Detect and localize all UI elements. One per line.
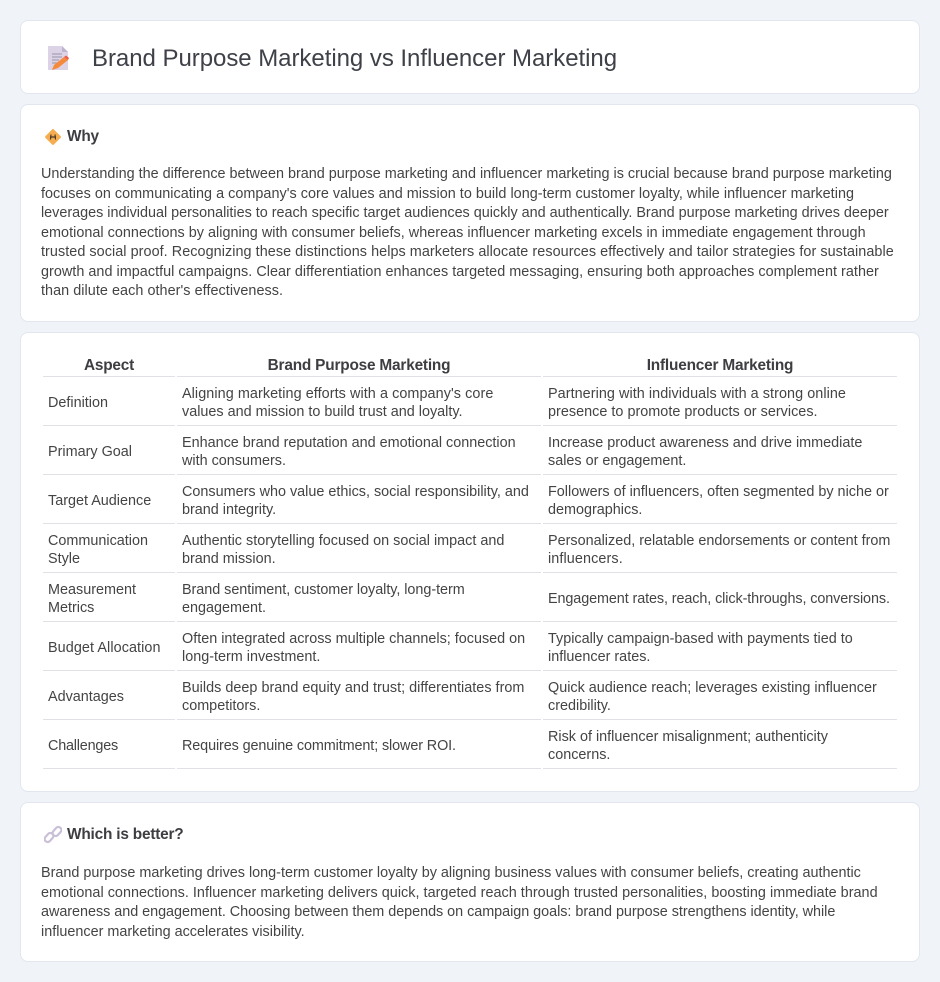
row: advantages: Builds deep brand equity and trust; differentiates from [182,680,524,696]
title: Brand Purpose Marketing vs Influencer Marketing [92,45,617,72]
row: advantages: Advantages [48,689,124,705]
text: which is better paragraph [41,865,878,940]
row: definition: Aligning marketing efforts with a company's core [182,386,493,402]
icon: document with pencil [48,46,69,70]
row: definition [48,386,846,420]
row: primary goal: with consumers. [182,453,286,469]
row: primary goal: Enhance brand reputation and emotional connection [182,435,516,451]
table: comparison [43,357,897,769]
text: which is better paragraph: awareness and engagement. Choosing between them depends on campaign goals: brand purpose strengthens identity, while [41,904,835,920]
row: communication style: influencers. [548,551,623,567]
icon: warning diamond [45,129,61,145]
panel: header [20,20,920,94]
text: which is better paragraph: emotional connections. Influencer marketing delivers quick, targeted reach through trusted personalities, boosting immediate brand [41,884,878,900]
text: why paragraph [41,166,894,299]
row: communication style: Style [48,551,80,567]
row: definition: values and mission to build trust and loyalty. [182,404,462,420]
row: measurement metrics: Metrics [48,600,94,616]
heading: which is better: Which is better? [67,826,184,843]
row: challenges [48,729,828,763]
heading: why: Why [67,128,99,145]
row: definition: Definition [48,395,108,411]
row: communication style: Communication [48,533,148,549]
row: target audience: Followers of influencers, often segmented by niche or [548,484,889,500]
row: communication style: Authentic storytelling focused on social impact and [182,533,504,549]
row: definition: Partnering with individuals with a strong online [548,386,846,402]
text: why paragraph: growth and impactful campaigns. Clear differentiation enhances targeted messaging, ensuring both approaches complement rather [41,264,879,280]
row: budget allocation: Budget Allocation [48,640,161,656]
row: target audience: demographics. [548,502,642,518]
row: budget allocation: Typically campaign-based with payments tied to [548,631,853,647]
row: challenges: concerns. [548,747,610,763]
text: why paragraph: Understanding the difference between brand purpose marketing and influencer marketing is crucial because brand purpose marketing [41,166,892,182]
row: measurement metrics: Engagement rates, reach, click-throughs, conversions. [548,591,890,607]
row: primary goal [48,435,862,469]
row: target audience: Consumers who value ethics, social responsibility, and [182,484,529,500]
panel: which is better [20,802,920,962]
row: communication style: brand mission. [182,551,276,567]
panel: why [20,104,920,322]
icon: chain link [44,826,62,844]
row: budget allocation [48,631,853,665]
text: why paragraph: emotional connections by aligning with consumer beliefs, whereas influencer marketing excels in immediate engagement through [41,224,866,240]
row: measurement metrics: Measurement [48,582,136,598]
row: challenges: Risk of influencer misalignment; authenticity [548,729,828,745]
row: primary goal: Increase product awareness and drive immediate [548,435,862,451]
row: measurement metrics: engagement. [182,600,266,616]
row: primary goal: sales or engagement. [548,453,686,469]
text: why paragraph: focuses on communicating a company's core values and mission to build long-term customer loyalty, while influencer marketing [41,186,854,202]
row: measurement metrics: Brand sentiment, customer loyalty, long-term [182,582,465,598]
text: why paragraph: leverages individual personalities to reach specific target audiences quickly and authentically. Brand purpose marketing drives deeper [41,205,889,221]
row: communication style [48,533,890,567]
row: budget allocation: influencer rates. [548,649,650,665]
row: advantages: credibility. [548,698,611,714]
row: challenges: Challenges [48,738,118,754]
row: target audience: Target Audience [48,493,151,509]
row: target audience [48,484,889,518]
text: which is better paragraph: influencer marketing accelerates visibility. [41,924,305,940]
row: measurement metrics [48,582,890,616]
text: which is better paragraph: Brand purpose marketing drives long-term customer loyalty by aligning business values with consumer beliefs, creating authentic [41,865,861,881]
row: advantages: Quick audience reach; leverages existing influencer [548,680,877,696]
row: definition: presence to promote products or services. [548,404,818,420]
text: why paragraph: than dilute each other's effectiveness. [41,283,283,299]
row: budget allocation: long-term investment. [182,649,320,665]
row: budget allocation: Often integrated across multiple channels; focused on [182,631,525,647]
column header: aspect: Aspect [84,357,134,374]
row: primary goal: Primary Goal [48,444,132,460]
row: communication style: Personalized, relatable endorsements or content from [548,533,890,549]
panel: comparison table [20,332,920,792]
text: why paragraph: trusted social proof. Recognizing these distinctions helps marketers allocate resources effectively and tailor strategies for sustainable [41,244,894,260]
row: target audience: brand integrity. [182,502,276,518]
row: advantages: competitors. [182,698,260,714]
column header: brand purpose marketing: Brand Purpose Marketing [268,357,450,374]
column header: influencer marketing: Influencer Marketing [647,357,793,374]
row: challenges: Requires genuine commitment; slower ROI. [182,738,456,754]
row: advantages [48,680,877,714]
